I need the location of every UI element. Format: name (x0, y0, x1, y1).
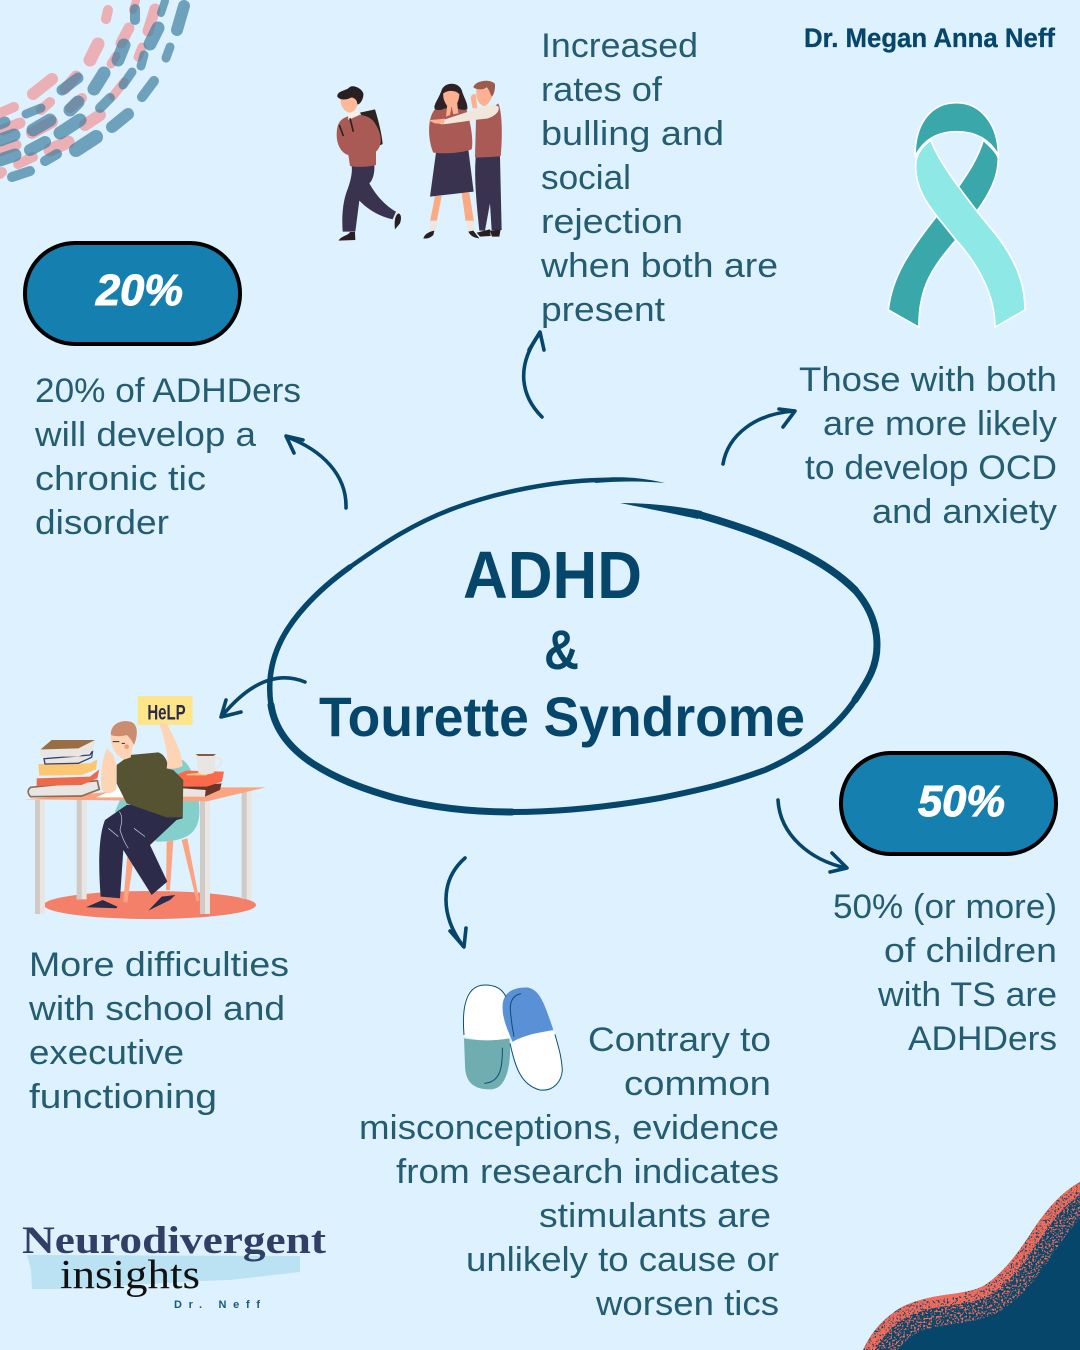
arrow: to school difficulties (221, 678, 305, 717)
author name: Dr. Megan Anna Neff (804, 23, 1056, 53)
body text: stimulants: misconceptions, evidence (359, 1109, 779, 1147)
body text: stimulants: worsen tics (595, 1285, 779, 1323)
rug (44, 891, 256, 919)
body text: stimulants: stimulants are (539, 1197, 771, 1235)
body text: bullying (540, 27, 778, 329)
body text: OCD and anxiety (799, 361, 1058, 531)
body text: stimulants (359, 1021, 779, 1323)
stat pill: 20%: 20% (95, 266, 183, 315)
body text: 20 percent: chronic tic (35, 460, 206, 498)
body text: bullying: Increased (541, 27, 698, 65)
help sign: HeLP (147, 700, 186, 724)
body text: bullying: social (541, 159, 631, 197)
body text: 50 percent: with TS are (877, 976, 1057, 1014)
body text: 50 percent: 50% (or more) (833, 888, 1057, 926)
body text: school: executive (29, 1034, 184, 1072)
icon: awareness ribbon (888, 103, 1025, 327)
body text: school: More difficulties (29, 946, 289, 984)
body text: 20 percent: 20% of ADHDers (35, 372, 301, 410)
title: ADHD (463, 538, 642, 613)
arrow: to OCD (723, 409, 795, 464)
body text: bullying: when both are (540, 247, 778, 285)
body text: stimulants: Contrary to (588, 1021, 771, 1059)
help sign (138, 696, 193, 725)
stat pill: 20% (25, 243, 240, 344)
body text: bullying: rejection (541, 203, 683, 241)
right books and cup (165, 754, 224, 797)
desk legs (35, 792, 252, 914)
decorative brush dashes top-left (0, 1, 184, 177)
stat pill: 50% (841, 753, 1056, 854)
body text: 50 percent: of children (884, 932, 1057, 970)
stat pill: 50%: 50% (918, 777, 1005, 826)
body text: OCD and anxiety: and anxiety (872, 493, 1058, 531)
body text: school: functioning (29, 1078, 217, 1116)
body text: 20 percent (34, 372, 301, 542)
student (86, 721, 183, 911)
body text: 20 percent: disorder (35, 504, 169, 542)
chair (115, 758, 199, 903)
arrow: to bullying (524, 332, 544, 417)
body text: 50 percent (833, 888, 1057, 1058)
body text: 50 percent: ADHDers (908, 1020, 1057, 1058)
logo: Neurodivergent insights (22, 1219, 326, 1311)
girl (423, 84, 479, 239)
body text: OCD and anxiety: are more likely (823, 405, 1058, 443)
logo: Neurodivergent insights: insights (60, 1251, 200, 1297)
corner blob (863, 1182, 1080, 1350)
logo: Neurodivergent insights: Dr. Neff (174, 1299, 260, 1311)
logo: Neurodivergent insights: Neurodivergent (22, 1219, 326, 1262)
body text: stimulants: common (624, 1065, 771, 1103)
icon: student at desk (24, 696, 266, 919)
arrow: to 20 percent (286, 436, 346, 508)
body text: school (28, 946, 289, 1116)
title (319, 538, 805, 748)
body text: bullying: rates of (541, 71, 662, 109)
book stack (28, 740, 99, 797)
body text: bullying: present (541, 291, 665, 329)
title: Tourette Syndrome (319, 685, 805, 748)
body text: stimulants: unlikely to cause or (466, 1241, 779, 1279)
arrow: to stimulants (446, 858, 466, 947)
student walking away (337, 86, 401, 241)
icon: capsules (463, 985, 562, 1090)
body text: 20 percent: will develop a (34, 416, 257, 454)
hand-drawn ellipse (270, 477, 877, 812)
body text: OCD and anxiety: to develop OCD (805, 449, 1057, 487)
title: & (544, 618, 579, 681)
body text: bullying: bulling and (541, 115, 724, 153)
boy pointing (428, 81, 502, 237)
icon: bullying illustration (337, 81, 502, 241)
desk top (24, 787, 266, 801)
body text: stimulants: from research indicates (396, 1153, 779, 1191)
paper and pencil (96, 788, 160, 797)
body text: school: with school and (28, 990, 285, 1028)
body text: OCD and anxiety: Those with both (799, 361, 1057, 399)
arrow: to 50 percent (778, 800, 847, 872)
